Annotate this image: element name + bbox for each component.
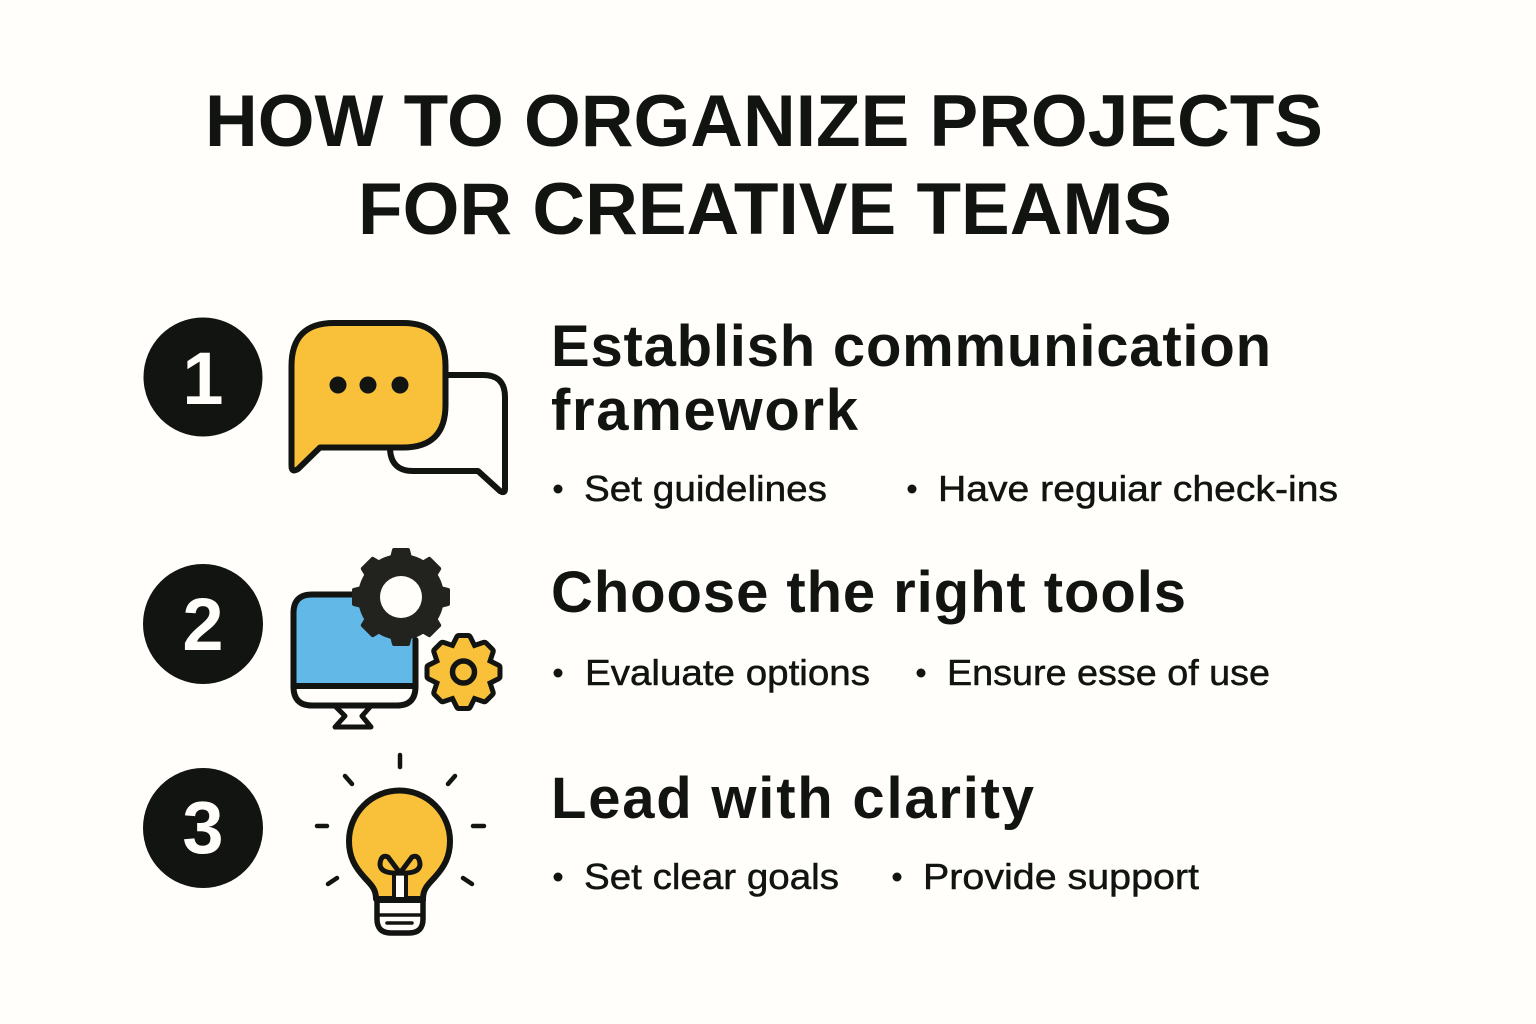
bullet: provide support: Provide support [923,856,1199,897]
heading: choose the right tools: Choose the right tools [551,560,1186,625]
title: HOW TO ORGANIZE PROJECTS [205,81,1323,162]
heading: lead with clarity: Lead with clarity [551,766,1034,831]
bullet: set guidelines: Set guidelines [584,468,827,509]
bullet: have regular check-ins: Have reguiar check-ins [938,468,1338,509]
title: FOR CREATIVE TEAMS [358,169,1172,250]
monitor [294,594,416,727]
number badge 3: 3 [182,786,224,869]
number badge 2 [143,564,263,684]
bullet: evaluate options: Evaluate options [585,652,870,693]
heading: establish communication framework [551,314,1271,443]
dark gear [354,550,448,644]
icon: light bulb [317,755,484,933]
number badge 1 [144,318,262,436]
icon: chat bubbles [292,323,505,492]
yellow gear [430,638,498,706]
bullet: set clear goals: Set clear goals [584,856,839,897]
number badge 2: 2 [182,583,224,666]
title [205,81,1323,250]
number badge 1: 1 [182,337,224,420]
heading: establish communication framework: Establish communication [551,314,1271,379]
icon: monitor with gears [294,550,498,727]
heading: establish communication framework: framework [551,378,859,443]
number badge 3 [143,768,263,888]
step 3: lead with clarity [143,755,1199,933]
step 2: choose the right tools [143,550,1270,727]
light rays [317,755,484,884]
bullet: ensure ease of use: Ensure esse of use [947,652,1270,693]
step 1: establish communication framework [144,314,1338,509]
